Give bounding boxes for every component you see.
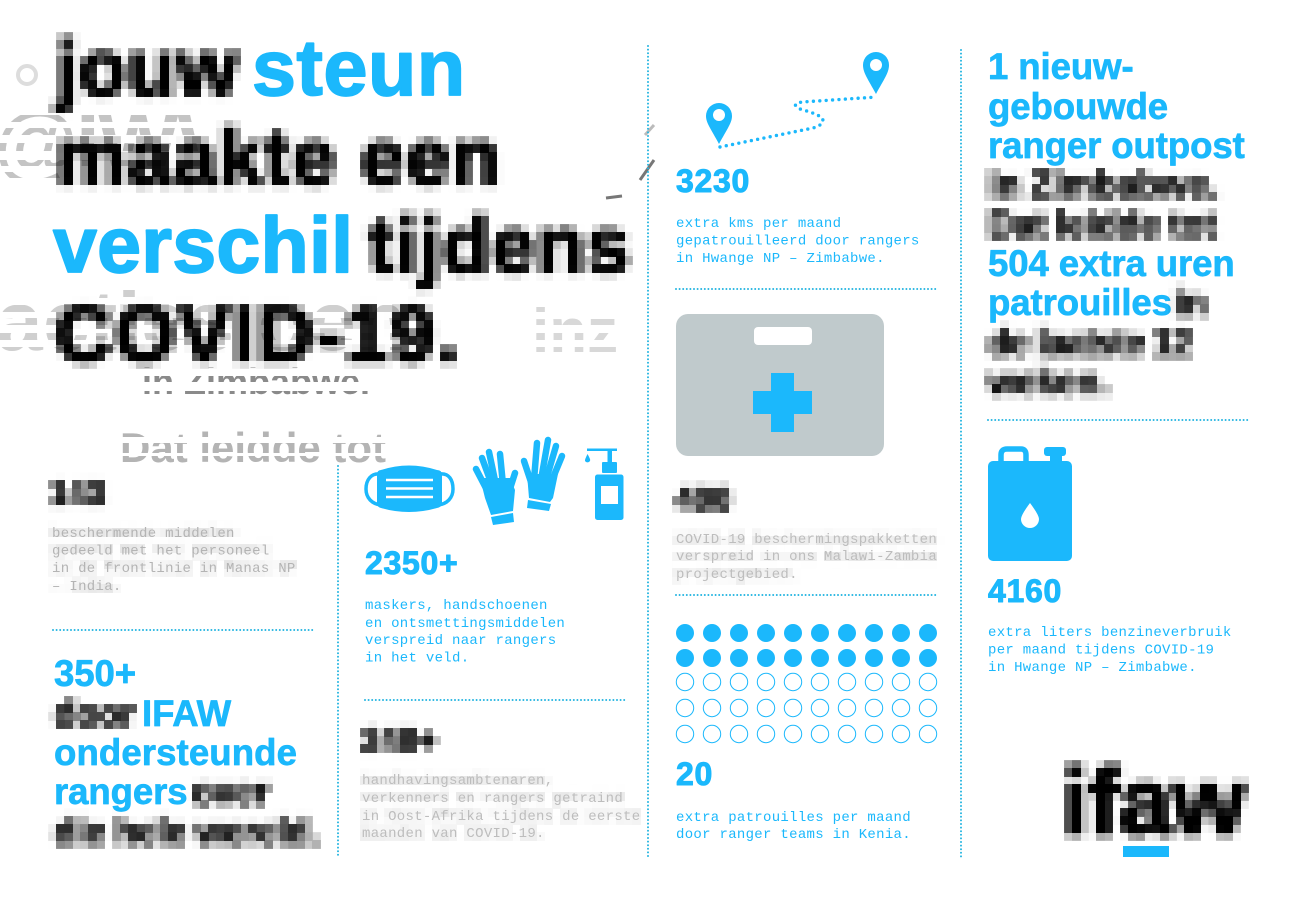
stat: 2350+ number: 2350+ [365,545,458,581]
stat: 350+ blue text: ondersteunde [54,732,297,773]
icon: gloves [476,440,562,525]
title: black words: maakte een [56,112,501,201]
outpost: blue text [988,46,1245,323]
stat: 248+ description: in Oost-Afrika tijdens de eerste [362,809,640,825]
stat: 4160 description: extra liters benzineverbruik [988,625,1232,641]
stat: 2350+ description: in het veld. [365,650,469,666]
stat: 3230 description: in Hwange NP – Zimbabwe. [676,251,885,267]
stat: 350+ blue text: 350+ [54,653,136,694]
title: black words: tijdens [368,200,631,289]
stat: 2350+ description: verspreid naar rangers [365,633,556,649]
ghost text fragments middle: inz [532,297,618,366]
stat: 350+ black text: door [54,693,135,734]
outpost: blue text: ranger outpost [988,125,1245,166]
stat: 4160 description: in Hwange NP – Zimbabwe. [988,660,1197,676]
logo: ifaw: ifaw [1062,749,1246,855]
stat: 143 description: gedeeld met het personeel [52,544,270,560]
icon: route map pins [706,52,889,147]
outpost: black text: in [1174,282,1206,323]
ghost fragment right of title [606,125,654,198]
stat: 400 description: COVID-19 beschermingspakketten [676,532,937,548]
stat: 400 description [676,532,937,583]
stat: 4160 number: 4160 [988,573,1062,609]
stat: 350+ black text [54,693,318,852]
stat: 350+ blue text: IFAW [142,693,232,734]
outpost: black text: weken. [987,361,1109,402]
stat: 350+ black text: over [192,771,269,812]
title: black words: jouw [54,23,238,112]
column dividers [338,46,961,857]
divider [365,699,626,701]
stat: 143 description: – India. [52,579,122,595]
divider [676,594,937,596]
title: blue words: steun [252,23,466,112]
logo underline bar [1123,846,1169,857]
ghost text fragments top left: @IWW [0,95,259,191]
divider [53,629,314,631]
ghost text fragments middle: acties oen [0,274,407,368]
outpost: blue text: patrouilles [988,282,1172,323]
stat: 20 description: extra patrouilles per maand [676,810,911,826]
divider [676,288,937,290]
title: black words: COVID-19. [55,289,461,378]
stat: 2350+ description [365,598,565,666]
stat: 248+ description: maanden van COVID-19. [362,826,545,842]
title: black words [54,23,631,378]
icon: first aid kit [676,314,884,456]
outpost: black text: Dat leidde tot [988,204,1216,245]
stat: 400 heading: 400 [676,481,732,517]
ghost text fragments middle [0,290,616,352]
outpost: black text: de laatste 12 [988,322,1191,363]
stat: 4160 description: per maand tijdens COVID-19 [988,642,1214,658]
stat: 143 description: beschermende middelen [52,526,235,542]
stat: 2350+ description: en ontsmettingsmiddelen [365,616,565,632]
outpost: blue text: 504 extra uren [988,243,1235,284]
ghost glyph small e [18,66,36,84]
stat: 400 description: projectgebied. [676,567,798,583]
outpost: black text: in Zimbabwe. [988,164,1218,205]
outpost: blue text: gebouwde [988,86,1168,127]
stat: 143 description: in de frontlinie in Manas NP [52,561,296,577]
ghost line: in Zimbabwe: in Zimbabwe. [142,361,370,402]
stat: 350+ blue text: rangers [54,771,188,812]
icon: sanitizer bottle [585,448,624,520]
stat: 3230 description: extra kms per maand [676,216,841,232]
outpost: black text [987,164,1218,402]
stat: 4160 description [988,625,1232,676]
stat: 20 description [676,810,911,843]
icon: face mask [366,466,453,512]
stat: 400 description: verspreid in ons Malawi-Zambia [676,549,937,565]
icon: jerrycan [988,447,1072,561]
stat: 248+ description: handhavingsambtenaren, [362,773,553,789]
stat: 248+ heading: 248+ [362,722,437,758]
stat: 143 heading: 143 [50,475,106,511]
title: blue words [53,23,466,289]
stat: 350+ blue text [54,653,297,812]
stat: 248+ description [362,773,640,842]
stat: 20 number: 20 [676,756,713,792]
chart: patrol dots [676,624,937,743]
stat: 3230 description: gepatrouilleerd door rangers [676,234,920,250]
divider [988,419,1248,421]
stat: 248+ description: verkenners en rangers getraind [362,791,623,807]
title: blue words: verschil [53,200,353,289]
stat: 3230 description [676,216,920,267]
stat: 20 description: door ranger teams in Kenia. [676,827,911,843]
outpost: blue text: 1 nieuw- [988,46,1134,87]
stat: 2350+ description: maskers, handschoenen [365,598,548,614]
stat: 143 description [52,526,296,595]
stat: 3230 number: 3230 [676,163,750,199]
stat: 350+ black text: die hele wereld. [54,811,318,852]
ghost line: Dat leidde tot: Dat leidde tot [120,424,386,471]
